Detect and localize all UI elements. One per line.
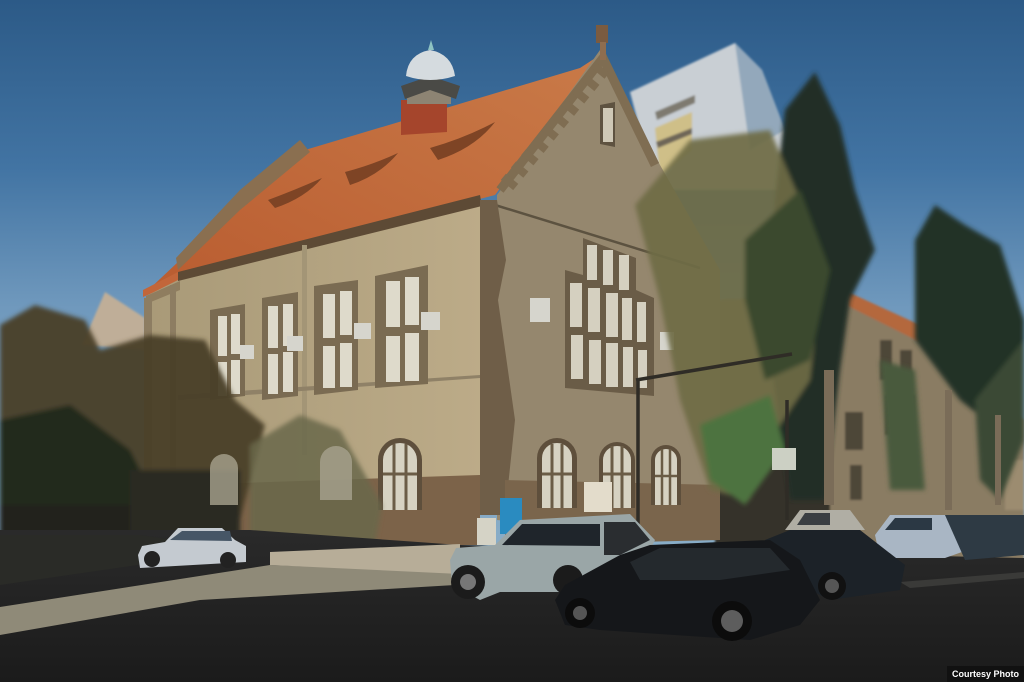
brick plinth <box>178 475 480 545</box>
gable facade windows <box>565 238 654 396</box>
cupola <box>401 40 460 135</box>
credit label <box>947 666 1024 682</box>
far right wing of building <box>715 292 1024 560</box>
arched windows seen through the trees <box>210 446 352 505</box>
trees: right of the gable <box>635 72 1024 505</box>
parked white sedan <box>138 528 246 568</box>
street lamp pole <box>636 354 792 525</box>
gable facade <box>495 25 720 540</box>
long facade <box>144 195 515 545</box>
silver SUV <box>450 514 655 600</box>
road and pavements <box>0 530 1024 682</box>
roof <box>143 55 600 297</box>
trees: left side <box>0 305 382 545</box>
small distant house <box>82 292 145 350</box>
gable plinth <box>505 480 720 545</box>
arched windows <box>378 438 681 510</box>
background tower block <box>630 43 785 190</box>
roof dormers <box>268 122 495 208</box>
air conditioners <box>240 298 674 359</box>
signs and doors at street level <box>477 448 796 545</box>
tree trunks <box>824 370 1001 510</box>
left facade windows <box>210 265 674 400</box>
credit label: Courtesy Photo <box>952 669 1019 679</box>
cars at far right <box>765 510 1024 600</box>
dark station wagon <box>555 540 820 641</box>
corner pilaster <box>480 200 515 515</box>
